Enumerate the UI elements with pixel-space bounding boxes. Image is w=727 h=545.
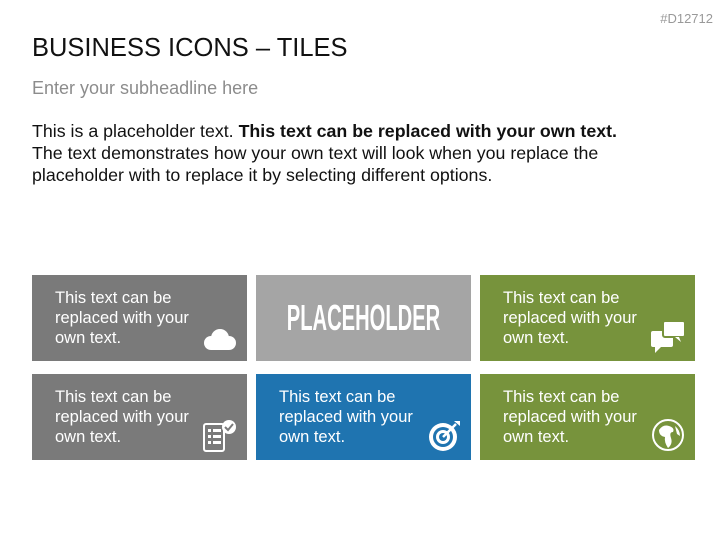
tile: chat [480,275,695,361]
tile: chat: own text. [503,329,569,347]
title: BUSINESS ICONS – TILES [32,34,348,62]
tile: target: replaced with your [279,408,413,426]
tile: placeholder: PLACEHOLDER [287,297,440,338]
icon: target [429,421,460,451]
body text: This is a placeholder text. This text can be replaced with your own text. [32,121,617,141]
tile: cloud: replaced with your [55,309,189,327]
tile: cloud [32,275,247,361]
tile: chat: This text can be [503,289,619,307]
tile: checklist: This text can be [55,388,171,406]
icon: globe [652,419,684,451]
tile: chat: replaced with your [503,309,637,327]
tile: checklist [32,374,247,460]
icon: cloud [204,329,236,350]
tile: checklist: own text. [55,428,121,446]
tile: globe [480,374,695,460]
tile: cloud: This text can be [55,289,171,307]
icon: checklist [203,420,236,452]
tile: target: This text can be [279,388,395,406]
tile: target [256,374,471,460]
body text: placeholder with to replace it by selecting different options. [32,165,492,185]
tile: target: own text. [279,428,345,446]
tile: globe: This text can be [503,388,619,406]
subheadline: Enter your subheadline here [32,78,258,98]
body text: The text demonstrates how your own text will look when you replace the [32,143,598,163]
tile: globe: replaced with your [503,408,637,426]
tile: placeholder [256,275,471,361]
tile: checklist: replaced with your [55,408,189,426]
tile: cloud: own text. [55,329,121,347]
code label: #D12712 [660,11,713,26]
icon: chat bubbles [651,322,684,353]
tile: globe: own text. [503,428,569,446]
body text [32,121,617,185]
